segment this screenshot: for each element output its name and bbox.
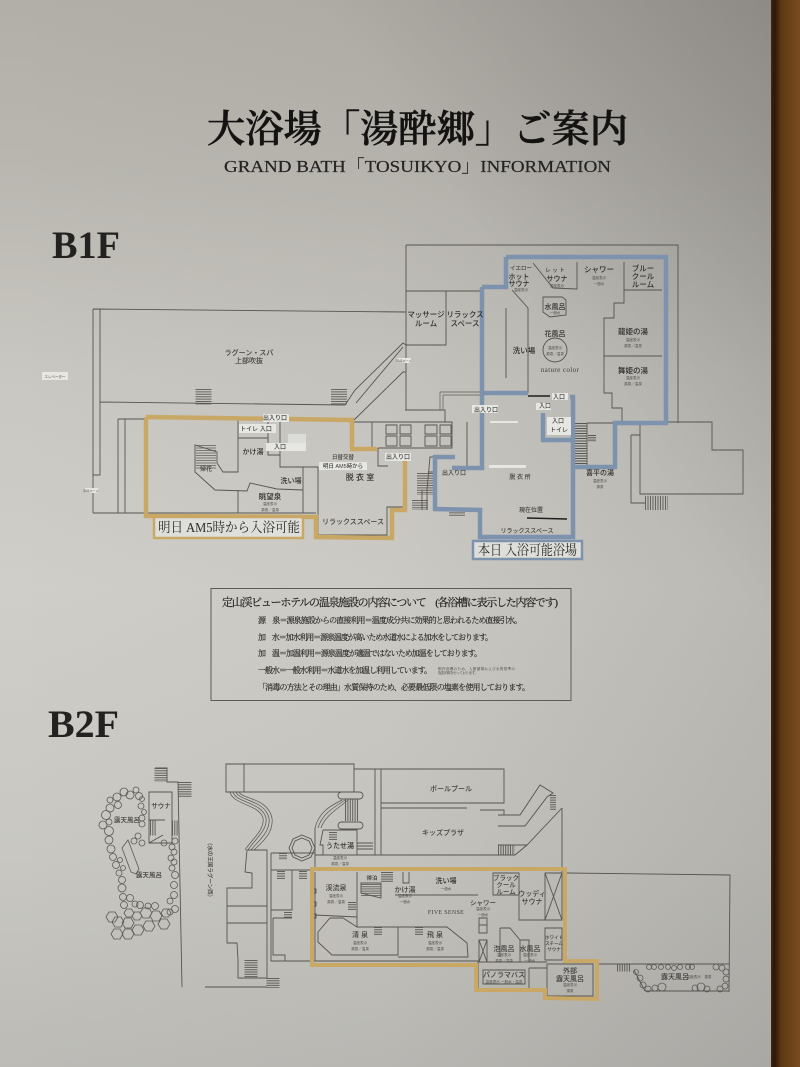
room labels: ルーム <box>415 319 438 328</box>
room labels: ルーム <box>496 888 516 896</box>
room labels: イエロー <box>510 265 532 272</box>
room labels: うたせ湯 <box>326 841 354 850</box>
room labels: 露天風呂 <box>114 816 140 824</box>
room labels: ラグーン・スパ <box>225 348 273 357</box>
room labels: 温度表示 <box>523 952 538 957</box>
room labels: 源泉 <box>596 484 604 489</box>
room labels: サウナ <box>546 275 568 283</box>
room labels: 入口 <box>553 394 565 401</box>
room labels: 一般水 <box>594 281 605 286</box>
room labels: トイレ 入口 <box>240 426 272 433</box>
room labels: 源泉／温泉 <box>351 946 369 951</box>
room labels: 現在位置 <box>519 506 543 514</box>
room labels: 温度表示 <box>514 287 529 292</box>
panel: hot spring notes: 加 水＝加水利用＝源泉温度が高いため水道水による加水をしております。 <box>258 632 493 642</box>
room labels: 温度表示 一般水・温泉 <box>486 979 523 984</box>
room labels: 脱 衣 室 <box>346 472 374 482</box>
highlight: orange outline <box>312 869 597 999</box>
callout: tomorrow: 明日 AM5時から入浴可能 <box>158 519 300 535</box>
highlight: blue outline (today) <box>435 257 666 537</box>
room labels: リラックススペース <box>322 518 384 526</box>
panel: hot spring notes: 館内浴槽のため、入館循環および水質基準の <box>438 666 515 671</box>
room labels: サウナ <box>151 802 171 810</box>
room labels: トイレ <box>550 428 568 434</box>
garden stones right <box>634 964 729 992</box>
heading: B2F: B2F <box>48 703 119 746</box>
room labels: 水風呂 <box>544 302 566 311</box>
panel: hot spring notes: 源 泉＝源泉施設からの直接利用＝温度成分共に効果的と思われるため直接引水。 <box>258 615 522 625</box>
room labels: ルーム <box>632 280 655 289</box>
room labels: 一般水 <box>400 899 411 904</box>
room labels: ブラック <box>493 873 519 882</box>
title: GRAND BATH「TOSUIKYO」INFORMATION <box>224 157 611 176</box>
room labels: 温度表示 <box>593 478 608 483</box>
room labels: 出入り口 <box>386 453 410 461</box>
room labels: 源泉／温泉 <box>624 381 642 386</box>
white labels <box>42 358 571 493</box>
callout: today: 本日 入浴可能浴場 <box>478 542 577 559</box>
walls <box>93 245 743 535</box>
room labels: 龍姫の湯 <box>618 326 648 336</box>
room labels: 温度表示 <box>626 337 641 342</box>
room labels: クール <box>496 881 516 889</box>
room labels: 温度表示 源泉 <box>686 974 712 979</box>
room labels: 一般水 <box>478 912 489 917</box>
room labels: 明日 AM5時から <box>323 462 363 470</box>
room labels: 出入り口 <box>474 406 498 414</box>
panel: hot spring notes <box>211 588 571 700</box>
room labels: 源泉／温泉 <box>546 351 564 356</box>
highlight: orange outline (tomorrow) <box>146 417 405 538</box>
room labels: 泡風呂 <box>494 944 514 953</box>
room labels: 温度表示 <box>353 940 368 945</box>
room labels: 温度表示 <box>476 906 491 911</box>
room labels: かけ湯 <box>394 885 416 894</box>
room labels: ホット <box>508 273 530 281</box>
room labels: スチーム <box>545 941 563 947</box>
room labels: 露天風呂 <box>661 973 689 981</box>
room labels: 温度表示 <box>563 982 578 987</box>
panel: hot spring notes: 定山渓ビューホテルの温泉施設の内容について (各浴槽に表示した内容です) <box>222 595 558 609</box>
room labels: 出入り口 <box>442 469 466 477</box>
room labels: 洗い場 <box>280 476 302 485</box>
panel: hot spring notes: 塩素消毒を行っております。 <box>438 670 478 675</box>
room labels: 洗い場 <box>436 876 456 885</box>
room labels: 温度表示 <box>550 283 565 288</box>
title: 大浴場「湯酔郷」ご案内 <box>207 109 628 151</box>
room labels: 清 泉 <box>352 930 368 939</box>
room labels: ボールプール <box>430 785 472 793</box>
room labels: 階段ホール <box>83 488 99 493</box>
room labels: 一般水 <box>550 310 561 315</box>
room labels: 日替交替 <box>332 453 354 461</box>
floor plan: B1F <box>42 245 743 559</box>
room labels: 源泉／温泉 <box>261 507 279 512</box>
room labels: エレベーター <box>44 374 66 379</box>
room labels: パノラマバス <box>483 971 525 979</box>
stairs <box>150 768 630 988</box>
room labels: 入口 <box>552 418 564 425</box>
room labels: シャワー <box>584 265 614 274</box>
walls <box>149 764 730 996</box>
title <box>207 109 628 176</box>
room labels: リラックス <box>446 310 484 319</box>
room labels <box>44 263 655 535</box>
room labels: 一般水 <box>525 958 536 963</box>
room labels: ホワイト <box>545 935 563 941</box>
room labels: 源泉 <box>566 988 574 993</box>
room labels: 温度表示 <box>398 893 413 898</box>
room labels: 温度表示 <box>497 952 512 957</box>
room labels: ブルー <box>632 263 654 273</box>
room labels: リラックススペース <box>500 527 554 535</box>
room labels: 出入り口 <box>263 414 287 422</box>
room labels: 洗い場 <box>513 345 536 355</box>
room labels: 温度表示 <box>626 375 641 380</box>
stairs <box>204 389 668 516</box>
room labels: 温度表示 <box>263 501 278 506</box>
wooden frame on the right <box>771 0 800 1067</box>
black door lines <box>527 396 567 519</box>
callout: tomorrow <box>154 517 303 538</box>
panel: hot spring notes: 一般水＝一般水利用＝水道水を加温し利用しています。 <box>258 665 432 675</box>
panel: hot spring notes: 加 温＝加温利用＝源泉温度が適温ではないため加温をしております。 <box>258 648 482 658</box>
room labels: 露天風呂 <box>556 975 584 983</box>
room labels: 脱 衣 所 <box>509 473 531 481</box>
room labels: 眺望泉 <box>259 491 282 501</box>
heading: B1F: B1F <box>52 224 120 267</box>
room labels: 温度表示 <box>592 275 607 280</box>
room labels: シャワー <box>470 899 496 907</box>
room labels: 源泉／温泉 <box>624 343 642 348</box>
room labels: 喜平の湯 <box>586 468 614 477</box>
room labels: 温度表示 <box>548 345 563 350</box>
room labels: スペース <box>450 319 480 328</box>
room labels: 入口 <box>274 444 286 451</box>
room labels: サウナ <box>547 946 561 953</box>
room labels: マッサージ <box>407 310 445 319</box>
room labels: 飛 泉 <box>427 930 443 939</box>
room labels: 舞姫の湯 <box>618 365 648 375</box>
room labels: かけ湯 <box>242 447 264 456</box>
room labels: 温度表示 <box>428 940 443 945</box>
room labels: 帰花 <box>200 465 212 473</box>
room labels: 外部 <box>563 966 577 975</box>
room labels: 一般水 <box>441 886 452 891</box>
room labels: クール <box>632 272 655 281</box>
room labels: FIVE SENSE <box>428 910 464 916</box>
room labels: ウッディ <box>518 889 546 898</box>
room labels: 渓流泉 <box>326 883 346 892</box>
room labels: 帰泊 <box>366 874 378 882</box>
room labels <box>114 785 712 993</box>
garden stones <box>99 787 178 939</box>
room labels: 温度表示 <box>329 893 344 898</box>
panel: hot spring notes: 「消毒の方法とその理由」水質保持のため、必要最低限の塩素を使用しております。 <box>258 682 530 692</box>
floor plan: B2F <box>99 764 730 999</box>
room labels: 源泉／温泉 <box>426 946 444 951</box>
room labels: 水風呂 <box>520 944 540 953</box>
room labels: 温度表示 <box>333 855 348 860</box>
room labels: 上部吹抜 <box>235 356 263 365</box>
room labels: サウナ <box>522 898 542 906</box>
room labels: キッズプラザ <box>422 828 464 837</box>
room labels: nature color <box>541 366 579 374</box>
room labels: 源泉／温泉 <box>495 958 513 963</box>
room labels: 階段ホール <box>396 358 412 363</box>
room labels: （水の王国ラグーン西） <box>206 840 214 900</box>
room labels: レ ッ ト <box>545 268 565 274</box>
room labels: 花風呂 <box>544 329 566 338</box>
room labels: 源泉／温泉 <box>327 899 345 904</box>
room labels: 入口 <box>539 403 551 410</box>
room labels: サウナ <box>508 280 530 288</box>
room labels: 露天風呂 <box>136 871 162 879</box>
room labels: 源泉／温泉 <box>331 861 349 866</box>
